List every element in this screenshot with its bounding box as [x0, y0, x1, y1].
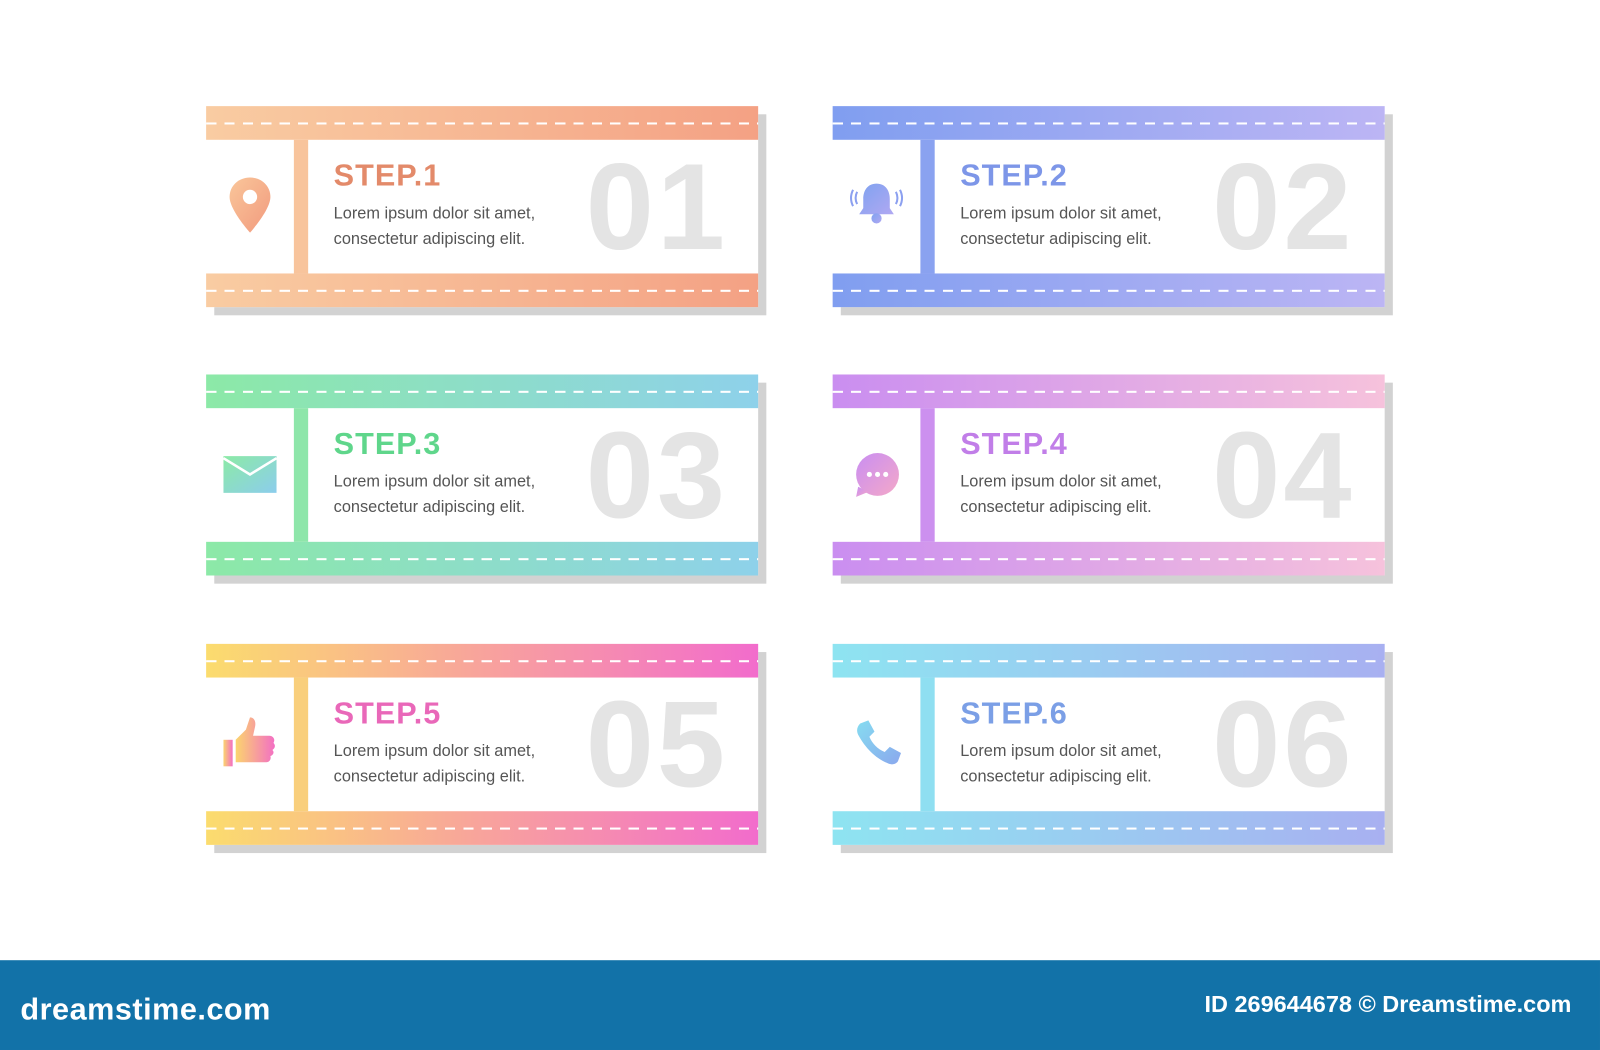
text step 6: consectetur adipiscing elit.	[960, 768, 1152, 786]
card: step 4	[832, 374, 1393, 584]
number 06: 06	[1212, 677, 1355, 813]
text step 1: consectetur adipiscing elit.	[334, 231, 525, 248]
number 04: 04	[1212, 407, 1355, 544]
card: step 3	[206, 374, 766, 584]
text step 6	[960, 743, 1162, 786]
title step 1: STEP.1	[334, 159, 441, 193]
text step 2: consectetur adipiscing elit.	[960, 231, 1152, 248]
number 01: 01	[586, 139, 728, 276]
card: step 6	[832, 644, 1393, 853]
text step 4	[960, 473, 1162, 516]
number 02: 02	[1212, 139, 1355, 276]
title step 3: STEP.3	[334, 428, 441, 461]
icon: bell	[850, 184, 904, 224]
title step 2: STEP.2	[960, 159, 1068, 193]
text step 4: consectetur adipiscing elit.	[960, 499, 1152, 516]
text step 6: Lorem ipsum dolor sit amet,	[960, 743, 1162, 760]
text step 2	[960, 205, 1162, 248]
text step 5: consectetur adipiscing elit.	[334, 768, 525, 786]
text step 1	[334, 205, 535, 248]
text step 2: Lorem ipsum dolor sit amet,	[960, 205, 1162, 222]
text step 3: Lorem ipsum dolor sit amet,	[334, 473, 535, 491]
icon: chat bubble	[856, 453, 899, 497]
text step 1: Lorem ipsum dolor sit amet,	[334, 205, 535, 222]
icon: phone	[857, 720, 901, 764]
text step 3	[334, 473, 535, 516]
text step 4: Lorem ipsum dolor sit amet,	[960, 473, 1162, 491]
footer id text: ID 269644678 © Dreamstime.com	[1204, 991, 1571, 1017]
number 03: 03	[586, 407, 728, 544]
number 05: 05	[586, 677, 728, 813]
icon: thumbs up	[223, 717, 275, 766]
title step 4: STEP.4	[960, 428, 1068, 461]
footer bar	[0, 960, 1600, 1050]
icon: envelope	[224, 456, 276, 493]
text step 5	[334, 743, 535, 786]
card: step 2	[832, 106, 1393, 316]
text step 5: Lorem ipsum dolor sit amet,	[334, 743, 535, 760]
card: step 5	[206, 644, 766, 853]
text step 3: consectetur adipiscing elit.	[334, 499, 525, 516]
footer logo text: dreamstime.com	[20, 993, 271, 1027]
title step 5: STEP.5	[334, 697, 441, 731]
icon: location pin	[230, 178, 270, 233]
card: step 1	[206, 106, 766, 316]
title step 6: STEP.6	[960, 697, 1068, 731]
